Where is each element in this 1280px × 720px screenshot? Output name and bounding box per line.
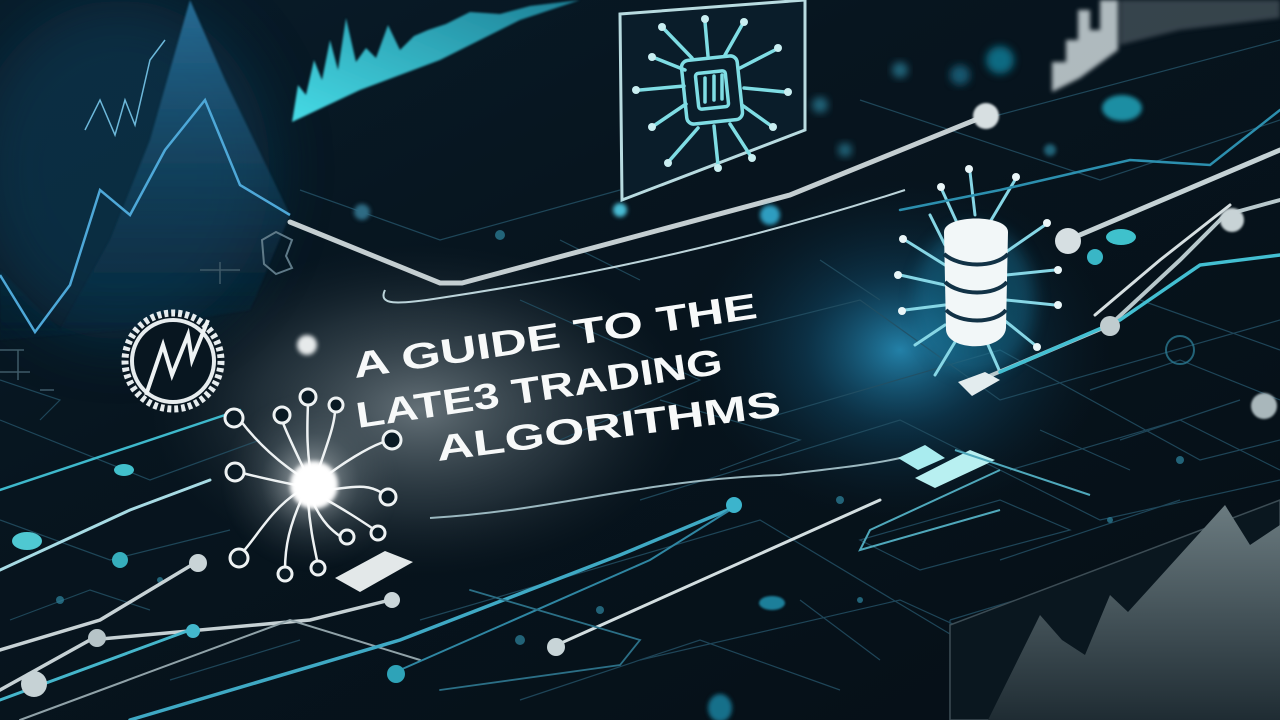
icon: top-right white histogram [1052, 0, 1280, 92]
title: LATE3 TRADING [353, 341, 725, 436]
icon: mountain chart [950, 500, 1280, 720]
icon: neural burst [220, 389, 401, 581]
icon: top-left market chart [0, 0, 292, 390]
icon: cyan histogram [292, 0, 580, 122]
bottom-centre pills and line [430, 445, 1090, 550]
right side data lines [900, 110, 1280, 380]
small glow node [297, 335, 317, 355]
bottom nodes [12, 464, 785, 720]
panel: microchip [620, 0, 805, 200]
background glow: right centre [690, 180, 1110, 520]
background small dots [56, 62, 1194, 645]
background glow: title haze [150, 245, 690, 575]
icon: chip core [640, 22, 785, 165]
background glow: left chart [0, 0, 270, 340]
curved thin line [383, 190, 905, 303]
white trend line [290, 103, 999, 283]
title [350, 285, 783, 469]
title: ALGORITHMS [434, 383, 783, 469]
right side nodes [354, 46, 1277, 419]
icon: gear with trend [125, 313, 221, 409]
icon: database chip [894, 165, 1062, 375]
bottom data lines [0, 410, 880, 720]
title: A GUIDE TO THE [350, 285, 760, 386]
